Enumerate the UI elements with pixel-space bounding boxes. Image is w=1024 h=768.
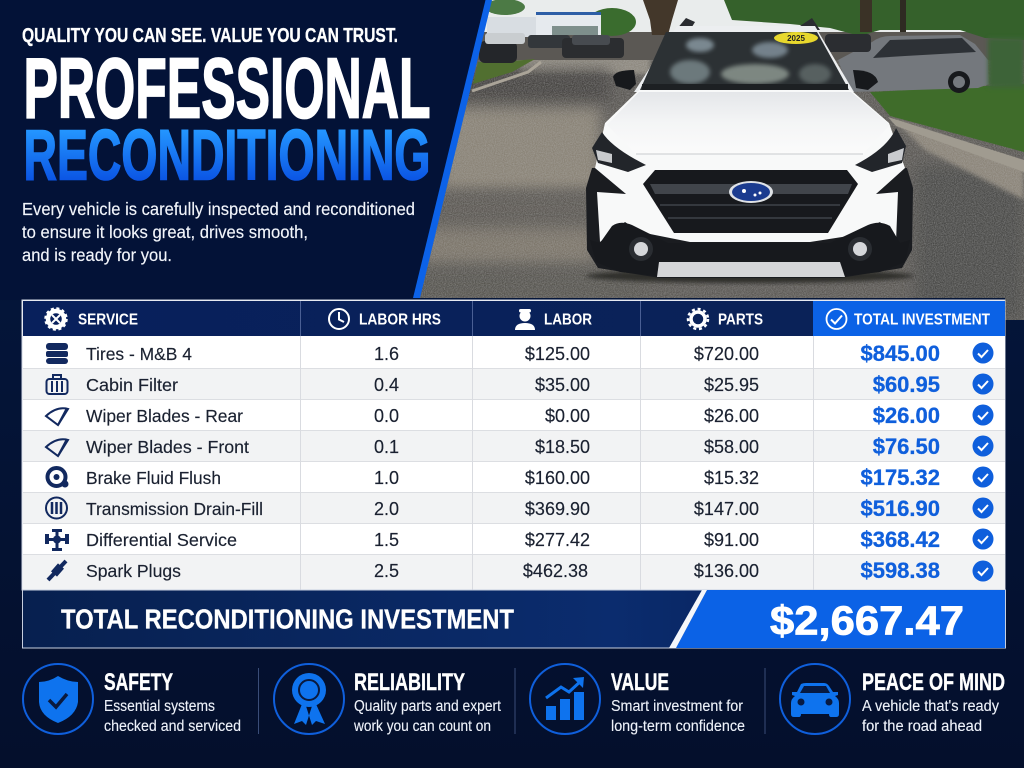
table header	[23, 301, 1005, 336]
row: transmission	[46, 496, 994, 521]
benefit: peace of mind: for the road ahead	[862, 718, 982, 735]
icon: shield	[23, 664, 93, 734]
row: differential: $91.00	[704, 530, 759, 550]
row: cabin filter: Cabin Filter	[86, 375, 178, 395]
row: front wiper	[46, 434, 994, 459]
benefit: value: VALUE	[611, 669, 669, 696]
row: differential: Differential Service	[86, 530, 237, 550]
icon: gear shifter	[46, 498, 67, 518]
icon: rising chart	[530, 664, 600, 734]
intro paragraph	[22, 199, 415, 265]
dealership building	[487, 17, 537, 37]
row: brake fluid: $175.32	[860, 465, 940, 490]
trees	[724, 0, 1024, 40]
row: tires: $125.00	[525, 344, 590, 364]
row: brake fluid	[48, 465, 994, 490]
title line 2: RECONDITIONING	[24, 116, 431, 196]
lower bumper	[590, 223, 910, 276]
row: cabin filter: $60.95	[873, 372, 940, 397]
blue diagonal stripe	[413, 0, 492, 298]
benefits strip	[23, 664, 1005, 735]
total investment heading: TOTAL INVESTMENT	[854, 312, 990, 328]
row: transmission: $369.90	[525, 499, 590, 519]
icon: wiper	[46, 439, 68, 456]
dark diagonal title panel	[0, 0, 487, 300]
total label: TOTAL RECONDITIONING INVESTMENT	[61, 604, 514, 634]
total amount: $2,667.47	[770, 598, 964, 644]
parts heading: PARTS	[718, 312, 763, 328]
parked cars	[479, 41, 517, 63]
icon: circled check	[826, 309, 846, 329]
benefit: reliability: RELIABILITY	[354, 669, 465, 696]
benefit: safety: Essential systems	[104, 698, 215, 715]
icon: wiper	[46, 408, 68, 425]
row: transmission: 2.0	[374, 499, 399, 519]
row: brake fluid: $160.00	[525, 468, 590, 488]
benefit: reliability: Quality parts and expert	[354, 698, 502, 715]
row: tires: $720.00	[694, 344, 759, 364]
icon: clock	[329, 309, 349, 329]
row: brake fluid: Brake Fluid Flush	[86, 468, 221, 488]
row: cabin filter: $35.00	[535, 375, 590, 395]
benefit: value	[530, 664, 745, 735]
gray SUV	[825, 34, 989, 93]
icon: brake disc	[48, 468, 68, 488]
service heading: SERVICE	[78, 312, 138, 328]
icon: award ribbon	[274, 664, 344, 734]
roof rails	[676, 18, 820, 30]
table frame	[22, 300, 1005, 590]
roof and pillars	[634, 26, 854, 92]
icon: gear with wrench	[46, 308, 66, 330]
row: rear wiper	[46, 403, 994, 428]
row: brake fluid: 1.0	[374, 468, 399, 488]
services table	[22, 300, 1005, 590]
inspection sticker: 2025	[787, 34, 805, 43]
row: tires: Tires - M&B 4	[86, 344, 192, 364]
lower body cladding	[586, 168, 913, 278]
row: spark plugs	[48, 558, 994, 583]
table rows	[23, 336, 1005, 590]
total amount panel	[676, 590, 1005, 648]
Subaru badge	[729, 181, 773, 203]
benefit: safety: SAFETY	[104, 669, 173, 696]
benefit: value: Smart investment for	[611, 698, 743, 715]
row: tires: 1.6	[374, 344, 399, 364]
skid plate	[657, 262, 845, 277]
mirrors	[613, 70, 636, 90]
row: differential	[45, 527, 994, 552]
hood	[607, 92, 890, 154]
windshield	[640, 32, 849, 90]
total label panel	[22, 590, 1006, 648]
grille	[643, 170, 858, 233]
benefit: reliability	[274, 664, 502, 735]
row: front wiper: $76.50	[873, 434, 940, 459]
row: spark plugs: 2.5	[374, 561, 399, 581]
icon: spark plug	[48, 561, 66, 580]
lot scenery	[405, 0, 1024, 322]
row: rear wiper: $26.00	[873, 403, 940, 428]
title line 1: PROFESSIONAL	[24, 42, 431, 136]
white body	[595, 90, 905, 242]
total bar	[22, 590, 1006, 648]
row: tires	[46, 341, 994, 366]
intro paragraph: and is ready for you.	[22, 245, 172, 265]
intro paragraph: Every vehicle is carefully inspected and reconditioned	[22, 199, 415, 219]
labor hours heading: LABOR HRS	[359, 312, 441, 328]
shadow	[586, 269, 914, 283]
row: cabin filter: 0.4	[374, 375, 399, 395]
row: transmission: $147.00	[694, 499, 759, 519]
row: brake fluid: $15.32	[704, 468, 759, 488]
icon: axle	[45, 529, 69, 551]
labor heading: LABOR	[544, 312, 592, 328]
row: rear wiper: $0.00	[545, 406, 590, 426]
benefit: peace of mind: A vehicle that's ready	[862, 698, 999, 715]
row: front wiper: $18.50	[535, 437, 590, 457]
row: rear wiper: $26.00	[704, 406, 759, 426]
fog lights	[629, 237, 872, 261]
photo: white Subaru in dealership lot	[405, 0, 1024, 322]
row: tires: $845.00	[860, 341, 940, 366]
row: cabin filter	[46, 372, 994, 397]
row: spark plugs: $136.00	[694, 561, 759, 581]
car	[586, 18, 914, 283]
icon: gear	[688, 309, 708, 329]
row: cabin filter: $25.95	[704, 375, 759, 395]
row: differential: $277.42	[525, 530, 590, 550]
icon: tires	[46, 343, 68, 364]
title	[24, 42, 431, 196]
tagline: QUALITY YOU CAN SEE. VALUE YOU CAN TRUST.	[22, 25, 398, 47]
row: spark plugs: $598.38	[860, 558, 940, 583]
benefit: peace of mind	[780, 664, 1005, 735]
benefit: safety: checked and serviced	[104, 718, 241, 735]
row: transmission: Transmission Drain-Fill	[86, 499, 263, 519]
inspection sticker	[774, 32, 818, 44]
benefit: reliability: work you can count on	[353, 718, 491, 735]
benefit: safety	[23, 664, 241, 735]
row: front wiper: $58.00	[704, 437, 759, 457]
row: front wiper: Wiper Blades - Front	[86, 437, 249, 457]
icon: filter	[46, 375, 68, 394]
icon: mechanic	[515, 309, 535, 330]
icon: car	[780, 664, 850, 734]
row: spark plugs: $462.38	[523, 561, 588, 581]
row: rear wiper: Wiper Blades - Rear	[86, 406, 243, 426]
intro paragraph: to ensure it looks great, drives smooth,	[22, 222, 308, 242]
headlights	[592, 132, 646, 172]
row: rear wiper: 0.0	[374, 406, 399, 426]
row: differential: 1.5	[374, 530, 399, 550]
benefit: value: long-term confidence	[611, 718, 745, 735]
row: differential: $368.42	[860, 527, 940, 552]
row: transmission: $516.90	[860, 496, 940, 521]
row: spark plugs: Spark Plugs	[86, 561, 181, 581]
row: front wiper: 0.1	[374, 437, 399, 457]
